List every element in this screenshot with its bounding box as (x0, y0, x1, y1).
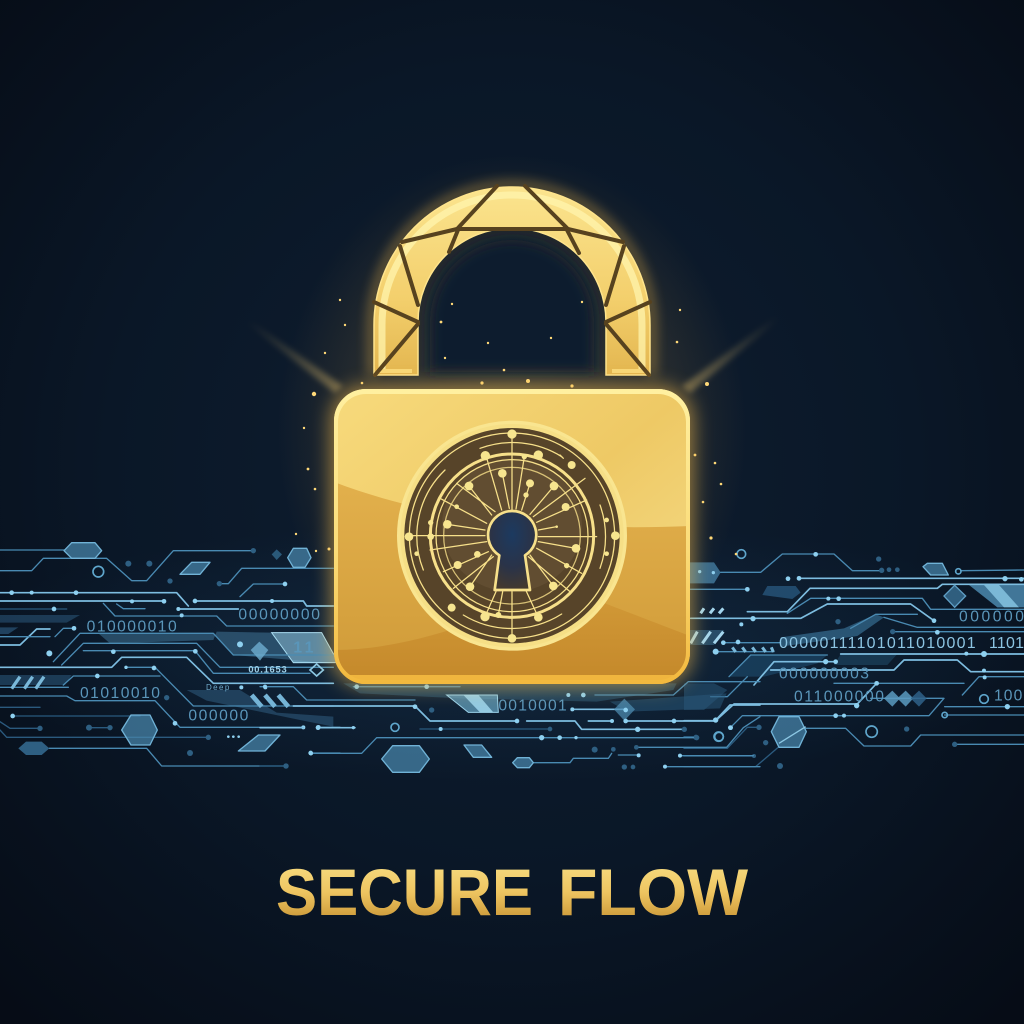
lock halo (277, 155, 747, 705)
shackle glow (372, 185, 652, 375)
right circuit panel: 1101 (989, 635, 1024, 652)
title (276, 855, 749, 929)
lower centre circuit panel (260, 682, 760, 772)
right circuit panel: 000000003 (779, 666, 869, 683)
body glow (330, 385, 694, 688)
circuit nodes (405, 429, 620, 643)
binary text centre: 0010001 (498, 698, 567, 715)
shackle facet lines (374, 186, 650, 375)
keyhole (488, 511, 536, 590)
left circuit panel: 000000 (188, 708, 249, 725)
left circuit panel: Deep (206, 683, 230, 692)
keyhole medallion (399, 422, 625, 649)
left circuit panel (0, 543, 340, 769)
shackle (374, 186, 650, 375)
shackle opening shadow (430, 240, 594, 372)
golden sparkles (295, 299, 737, 555)
circuit glow band (0, 520, 1024, 780)
left circuit panel: 00000000 (238, 606, 320, 623)
left circuit panel: 00.1653 (248, 665, 287, 675)
lock body (334, 389, 690, 684)
right circuit panel: 100 (994, 688, 1023, 705)
right circuit panel: 011000000 (794, 688, 884, 705)
title: FLOW (558, 855, 749, 929)
circuit rings (409, 433, 615, 638)
right circuit panel: 000000 (959, 608, 1024, 625)
binary text right: 00000111101011010001 (779, 635, 976, 652)
padlock (330, 185, 694, 688)
binary text left: 010000010 (87, 618, 177, 635)
left circuit panel: 01010010 (80, 685, 160, 702)
right circuit panel (684, 550, 1024, 769)
circuit spokes (409, 434, 597, 638)
light rays (248, 317, 778, 393)
title: SECURE (276, 855, 533, 929)
left circuit panel: 11 (293, 640, 314, 657)
